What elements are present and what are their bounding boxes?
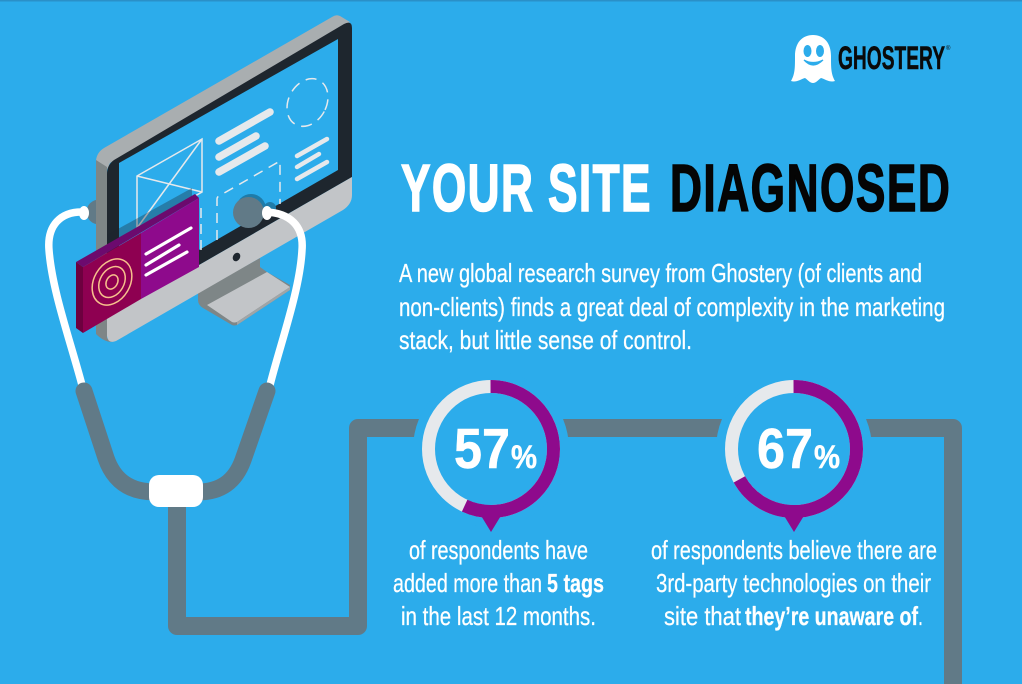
dashed circle bbox=[279, 72, 336, 133]
caption: 67%: . bbox=[918, 601, 923, 631]
caption: 67%: 3rd-party technologies on their bbox=[656, 568, 931, 598]
caption: 57%: of respondents have bbox=[409, 535, 588, 565]
monitor stand bbox=[198, 258, 290, 326]
image placeholder bbox=[137, 139, 202, 228]
card crimson face bbox=[83, 233, 141, 333]
title bbox=[401, 152, 950, 226]
card text lines bbox=[146, 228, 191, 275]
icon: monitor logo dot bbox=[231, 251, 242, 263]
right white tip bbox=[262, 206, 272, 220]
monitor top and side casing bbox=[96, 15, 350, 342]
stethoscope tube connector bbox=[177, 428, 953, 684]
caption: 67% bbox=[651, 535, 937, 631]
floating purple card bbox=[76, 194, 199, 333]
title: DIAGNOSED bbox=[670, 152, 950, 226]
figure: 57%: % bbox=[511, 439, 537, 475]
icon: ghost bbox=[791, 35, 835, 83]
logo: Ghostery bbox=[791, 35, 951, 83]
caption: 67%: site that bbox=[664, 601, 742, 631]
caption: 57%: in the last 12 months. bbox=[401, 601, 596, 631]
figure: 67%: % bbox=[814, 439, 840, 475]
thick text lines bbox=[219, 112, 270, 172]
right white tube bbox=[266, 212, 302, 385]
thin text lines bbox=[297, 139, 327, 179]
caption: 67%: of respondents believe there are bbox=[651, 535, 937, 565]
title: YOUR SITE bbox=[401, 152, 650, 226]
caption: 57% bbox=[393, 535, 604, 631]
figure: 57%: 57 bbox=[454, 417, 510, 481]
wordmark: GHOSTERY bbox=[838, 40, 945, 76]
icon: right earpiece bbox=[233, 194, 276, 228]
figure: 67%: 67 bbox=[757, 417, 813, 481]
left white tip bbox=[79, 206, 89, 220]
donut chart: 67% bbox=[732, 386, 856, 532]
screen wireframe content bbox=[137, 72, 336, 250]
monitor bezel bbox=[107, 23, 352, 318]
card purple face bbox=[141, 198, 199, 299]
stat: 67 percent bbox=[651, 371, 937, 631]
intro text: stack, but little sense of control. bbox=[399, 325, 692, 355]
stat: 57 percent bbox=[393, 371, 604, 631]
monitor chin bbox=[107, 177, 352, 342]
right grey tube bbox=[198, 391, 267, 492]
monitor screen bbox=[119, 39, 338, 296]
dashed box bbox=[217, 161, 280, 240]
intro text bbox=[399, 258, 945, 355]
icon: target rings bbox=[84, 252, 140, 312]
illustration: monitor bbox=[76, 15, 352, 342]
caption: 67%: they’re unaware of bbox=[745, 601, 918, 631]
card side edge bbox=[76, 262, 83, 333]
registered mark: ® bbox=[946, 45, 951, 52]
card shadow bbox=[107, 188, 192, 250]
white junction bbox=[149, 475, 203, 507]
caption: 57%: added more than bbox=[393, 568, 542, 598]
dashed box fragment bbox=[200, 208, 202, 250]
card top edge bbox=[76, 194, 199, 267]
stethoscope bbox=[49, 206, 302, 507]
caption: 57%: 5 tags bbox=[547, 568, 604, 598]
left white tube bbox=[49, 212, 84, 385]
icon: left earpiece behind monitor bbox=[86, 200, 112, 224]
donut chart: 57% bbox=[428, 386, 554, 532]
left grey tube bbox=[84, 391, 155, 492]
